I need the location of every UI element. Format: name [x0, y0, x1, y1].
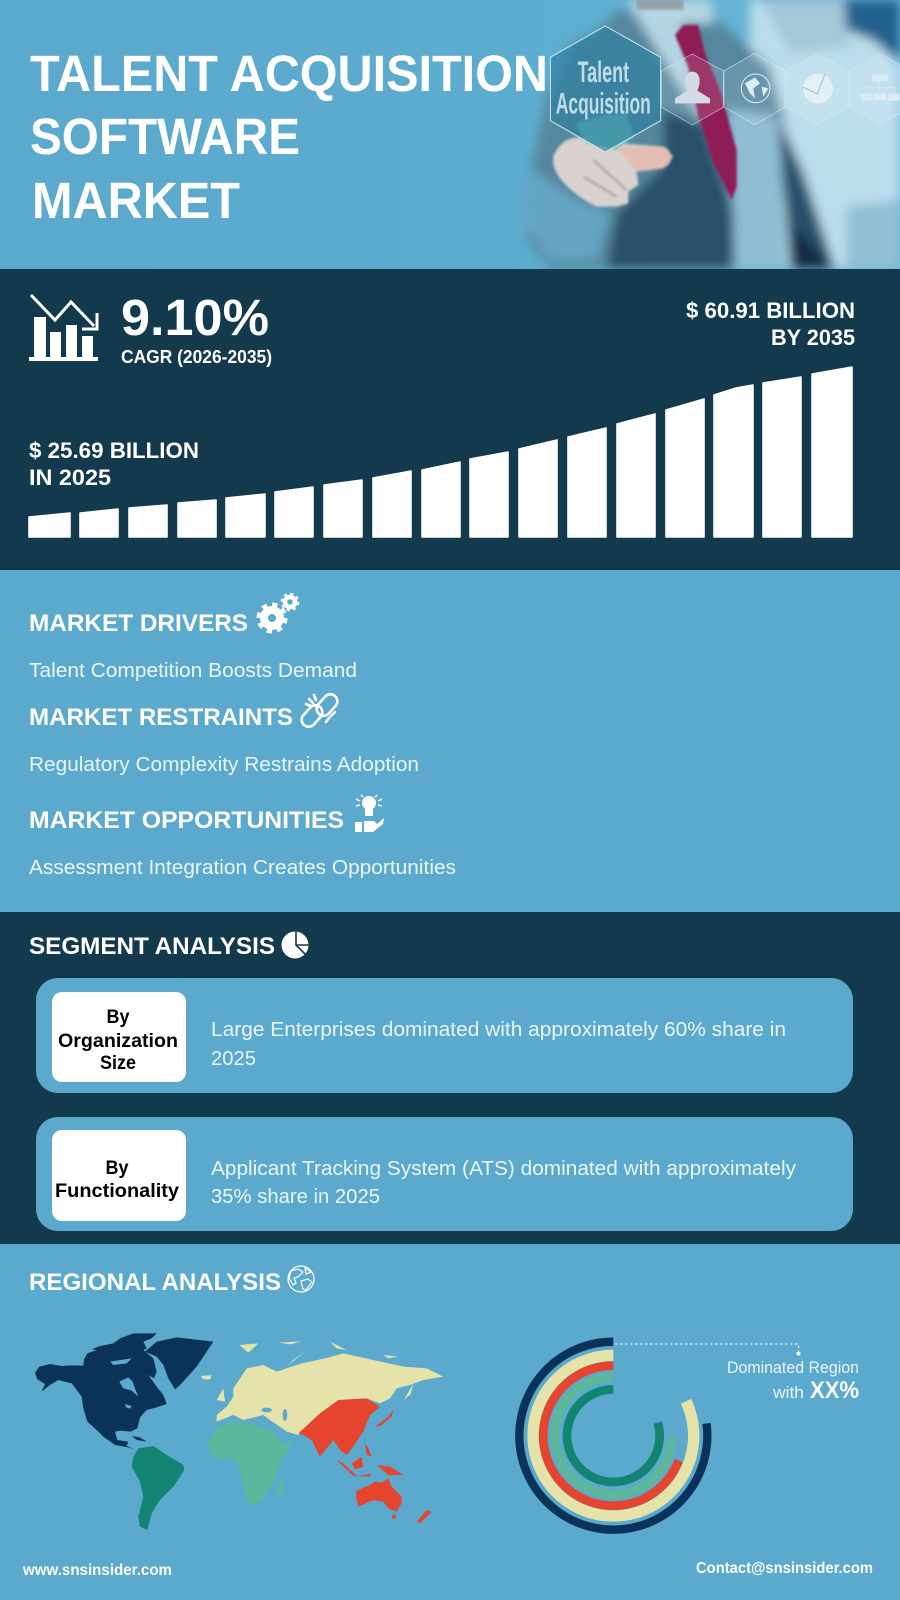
world map [35, 1333, 443, 1530]
2035 value: $ 60.91 BILLION [686, 298, 855, 323]
card: by organization size [36, 978, 853, 1093]
text: driver: Talent Competition Boosts Demand [29, 660, 357, 682]
card: by organization size: Large Enterprises dominated with approximately 60% share in [211, 1019, 786, 1041]
icon: pie chart [282, 930, 311, 958]
hexagon: talent acquisition: Talent [577, 56, 629, 89]
text: opportunity: Assessment Integration Creates Opportunities [29, 857, 456, 879]
footer: website: www.snsinsider.com [22, 1562, 172, 1579]
title: TALENT ACQUISITION [30, 45, 548, 102]
card: by functionality [36, 1117, 853, 1231]
panel: segment analysis [0, 912, 900, 1244]
photo: businessman touching hexagon interface [525, 0, 900, 269]
card: by functionality: Applicant Tracking System (ATS) dominated with approximately [211, 1158, 796, 1180]
2035 value: BY 2035 [771, 325, 855, 350]
callout: dominated region: with [772, 1383, 804, 1402]
heading: segment analysis: SEGMENT ANALYSIS [29, 933, 275, 960]
region: asia pacific [298, 1398, 432, 1523]
hexagon: talent acquisition [550, 26, 661, 152]
donut chart: regional share [519, 1342, 707, 1530]
panel: drivers, restraints, opportunities [0, 570, 900, 912]
necktie [675, 25, 737, 200]
title [30, 45, 548, 229]
2025 value [29, 438, 199, 490]
footer: contact: Contact@snsinsider.com [696, 1560, 873, 1577]
card: by organization size: Organization [58, 1031, 178, 1052]
card: by organization size: Size [100, 1053, 136, 1074]
card: by functionality: By [106, 1158, 129, 1179]
hexagon row: person, globe, pie chart, org chart icons [662, 53, 900, 125]
panel: header with photo [0, 0, 900, 269]
2025 value: $ 25.69 BILLION [29, 438, 199, 463]
heading: market opportunities: MARKET OPPORTUNITIES [29, 807, 344, 834]
icon: declining line over bar chart [29, 295, 98, 361]
panel: regional analysis [0, 1244, 900, 1600]
card: by organization size: By [106, 1007, 130, 1028]
heading: market drivers: MARKET DRIVERS [29, 610, 248, 637]
callout: dominated region [615, 1344, 859, 1404]
panel: market size and CAGR [0, 269, 900, 570]
hand [553, 113, 673, 207]
region: africa [208, 1422, 295, 1506]
card: by functionality: 35% share in 2025 [211, 1186, 380, 1208]
title: MARKET [32, 172, 240, 229]
card: by organization size: 2025 [211, 1048, 256, 1070]
icon: gears [258, 594, 298, 632]
region: south america [132, 1446, 184, 1530]
title: SOFTWARE [30, 108, 300, 165]
heading: market restraints: MARKET RESTRAINTS [29, 704, 293, 731]
2035 value [686, 298, 855, 350]
region: europe and north asia [201, 1341, 443, 1435]
heading: regional analysis: REGIONAL ANALYSIS [29, 1269, 281, 1296]
CAGR label: CAGR (2026-2035) [121, 347, 272, 367]
callout: dominated region: XX% [810, 1377, 859, 1404]
icon: globe [288, 1266, 314, 1292]
icon: broken chain link [299, 691, 340, 730]
card: by functionality: Functionality [55, 1181, 179, 1202]
callout: dominated region: Dominated Region [727, 1358, 859, 1377]
region: north america [35, 1333, 213, 1450]
CAGR value: 9.10% [121, 289, 269, 346]
text: restraint: Regulatory Complexity Restrains Adoption [29, 754, 419, 776]
hexagon: talent acquisition: Acquisition [556, 87, 651, 120]
2025 value: IN 2025 [29, 465, 111, 490]
bar chart: growth 2025 to 2035 [29, 367, 852, 537]
icon: lightbulb in hand [355, 795, 384, 832]
